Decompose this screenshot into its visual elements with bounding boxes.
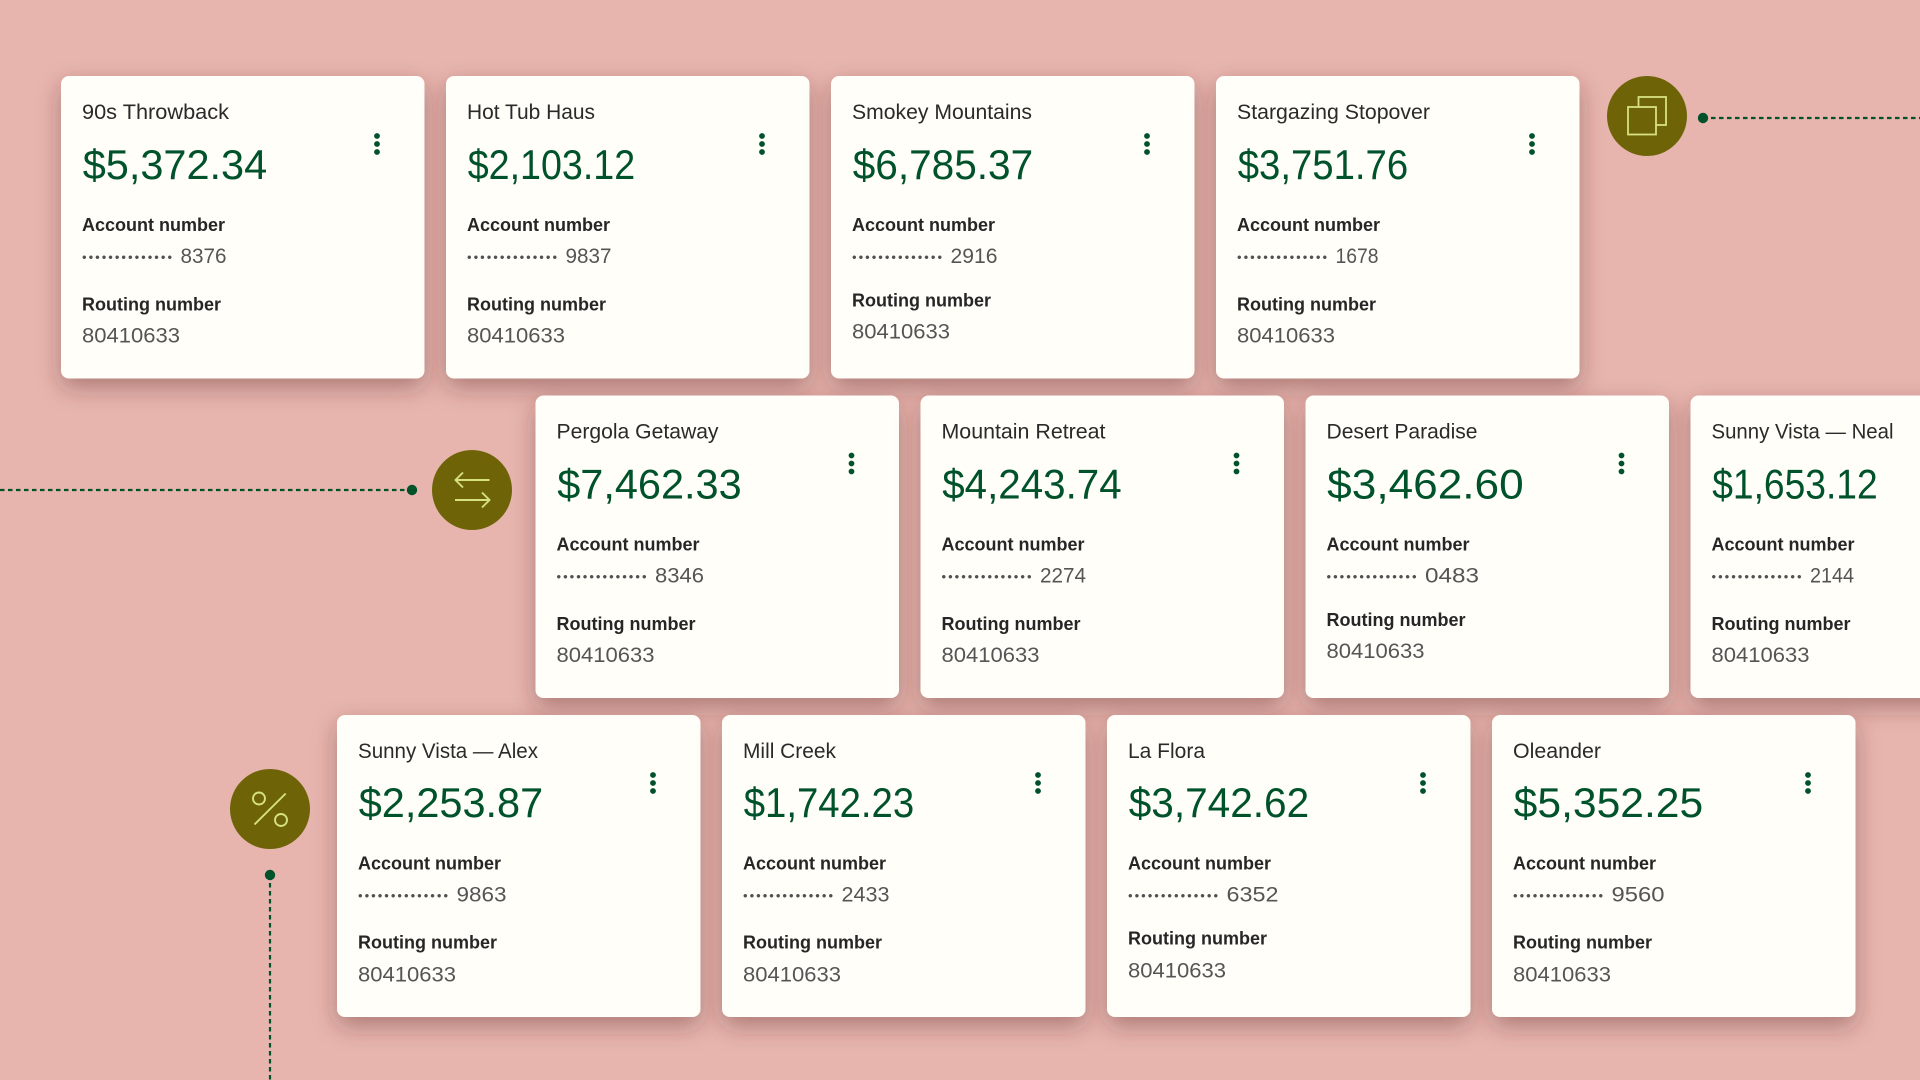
card: Mill Creek [722,715,1086,1017]
routing number [1513,932,1652,986]
routing number [743,932,882,986]
account number: 9863 [456,884,506,906]
balance: $3,462.60 [1327,460,1524,508]
account number: Account number [1712,534,1854,554]
connector: middle left [0,485,417,495]
account number: Account number [1513,854,1656,874]
account number: 9560 [1612,884,1664,906]
routing number: 80410633 [467,324,565,348]
account number [1237,215,1380,268]
balance: $5,352.25 [1514,779,1703,826]
account name: Pergola Getaway [556,420,719,444]
account number [556,534,704,588]
account number: •••••••••••••• [1128,888,1218,903]
card: Oleander [1492,715,1856,1017]
routing number [467,294,606,348]
routing number [556,614,696,667]
account number: 1678 [1336,245,1378,268]
account number: Account number [358,854,501,874]
balance: $6,785.37 [853,141,1033,188]
account number: 9837 [566,245,612,268]
card: Hot Tub Haus [446,76,810,378]
routing number: Routing number [1513,932,1652,952]
account number [743,854,890,906]
account number [1513,854,1664,906]
connector: top right [1698,113,1920,123]
account name: Smokey Mountains [852,101,1032,124]
routing number [942,614,1080,667]
account number [1326,534,1479,588]
menu icon [1144,133,1150,155]
routing number: 80410633 [1326,640,1424,663]
menu icon [1805,772,1811,794]
card: Desert Paradise [1306,396,1669,698]
account number: Account number [1128,854,1271,874]
card: Stargazing Stopover [1216,76,1580,378]
routing number: Routing number [358,932,497,952]
menu icon [650,772,656,794]
menu icon [1529,133,1535,155]
routing number [852,290,991,344]
routing number: 80410633 [1513,964,1611,986]
balance: $1,653.12 [1712,460,1878,508]
balance: $2,103.12 [468,141,635,188]
balance: $7,462.33 [557,460,742,508]
account number: Account number [942,534,1084,554]
account number: •••••••••••••• [467,250,557,264]
card: Mountain Retreat [920,396,1284,698]
routing number: 80410633 [1128,960,1226,982]
balance: $3,751.76 [1238,141,1408,188]
account number: •••••••••••••• [852,250,942,264]
account number: •••••••••••••• [1712,569,1802,584]
card: Sunny Vista — Alex [337,715,700,1017]
account number: Account number [1326,534,1470,554]
account number [942,534,1086,588]
balance: $3,742.62 [1129,779,1309,826]
routing number [1326,610,1466,663]
routing number: 80410633 [942,644,1040,667]
icon: transfer arrows [432,450,512,530]
connector: bottom left [265,870,275,1080]
routing number [1237,294,1376,348]
card: La Flora [1107,715,1470,1017]
balance: $1,742.23 [744,779,914,826]
account name: Hot Tub Haus [467,101,595,124]
account number: 6352 [1226,884,1278,906]
account number: •••••••••••••• [82,250,172,264]
card: 90s Throwback [61,76,424,378]
account number: •••••••••••••• [743,888,833,903]
icon: copy squares [1607,76,1687,156]
card: Sunny Vista — Neal [1690,396,1920,698]
routing number: Routing number [82,294,221,314]
routing number: 80410633 [82,324,180,348]
routing number: Routing number [942,614,1080,634]
account number: Account number [556,534,700,554]
routing number: 80410633 [1712,644,1810,667]
routing number: 80410633 [1237,324,1335,348]
menu icon [1420,772,1426,794]
account number: 2916 [950,245,998,268]
account name: La Flora [1128,740,1205,763]
menu icon [374,133,380,155]
account number [358,854,506,906]
routing number: Routing number [852,290,991,310]
account number: •••••••••••••• [1326,569,1417,584]
routing number: Routing number [1326,610,1466,630]
routing number: Routing number [1237,294,1376,314]
account number [1712,534,1854,588]
account number: 2274 [1040,564,1086,588]
account name: Sunny Vista — Alex [358,740,538,763]
account name: Sunny Vista — Neal [1712,420,1894,444]
account number: Account number [852,215,995,235]
account number [852,215,998,268]
account number: 8346 [655,564,704,588]
routing number: Routing number [467,294,606,314]
account number: 0483 [1425,564,1479,588]
account name: Desert Paradise [1326,420,1478,444]
menu icon [1234,453,1239,474]
account name: Mill Creek [743,740,836,763]
account name: Stargazing Stopover [1237,101,1430,124]
card: Smokey Mountains [831,76,1194,378]
menu icon [759,133,765,155]
balance: $2,253.87 [359,779,543,826]
routing number: 80410633 [852,320,950,344]
account number: Account number [467,215,610,235]
account number: Account number [743,854,886,874]
icon: percent [230,769,310,849]
routing number [82,294,221,348]
account name: Oleander [1513,740,1601,763]
account number: •••••••••••••• [1237,250,1327,264]
account number: •••••••••••••• [556,569,647,584]
routing number [1128,928,1267,982]
account name: Mountain Retreat [942,420,1106,444]
account number: Account number [82,215,225,235]
routing number: 80410633 [743,964,841,986]
routing number [1712,614,1850,667]
account number: Account number [1237,215,1380,235]
account number [1128,854,1278,906]
account number: •••••••••••••• [358,888,448,903]
routing number: Routing number [1712,614,1850,634]
menu icon [849,453,854,474]
routing number [358,932,497,986]
routing number: 80410633 [358,964,456,986]
card: Pergola Getaway [536,396,899,698]
account number: 2433 [842,884,890,906]
routing number: 80410633 [556,644,654,667]
account number: 2144 [1810,564,1854,588]
account number [82,215,226,268]
routing number: Routing number [1128,928,1267,948]
account number: 8376 [180,245,226,268]
account number: •••••••••••••• [942,569,1032,584]
routing number: Routing number [743,932,882,952]
menu icon [1035,772,1041,794]
balance: $5,372.34 [83,141,267,188]
menu icon [1619,453,1624,474]
account number: •••••••••••••• [1513,888,1603,903]
balance: $4,243.74 [942,460,1122,508]
routing number: Routing number [556,614,696,634]
account number [467,215,612,268]
account name: 90s Throwback [82,101,230,124]
